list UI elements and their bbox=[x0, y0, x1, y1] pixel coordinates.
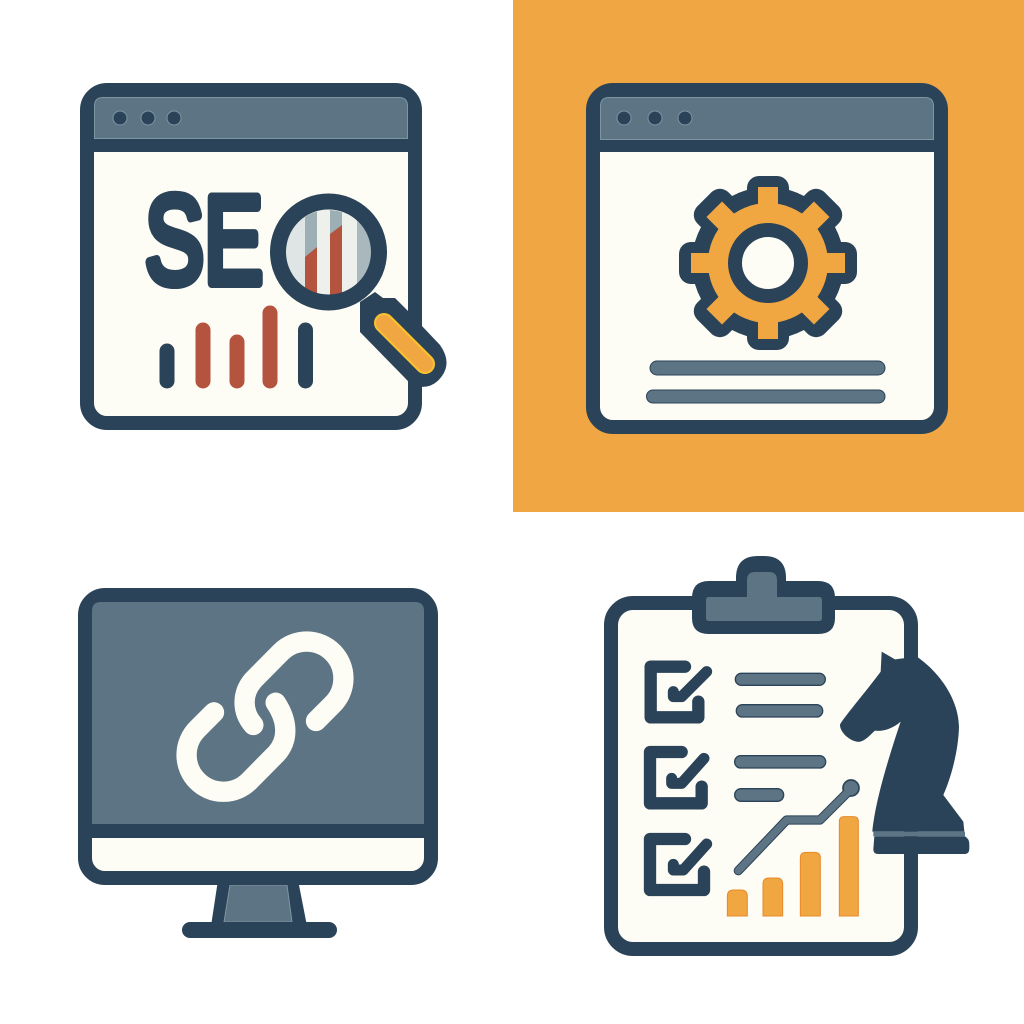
clip bbox=[692, 556, 835, 634]
trend line bbox=[738, 780, 859, 871]
screen frame bbox=[85, 595, 431, 878]
window frame bbox=[87, 90, 415, 423]
title bar bbox=[600, 98, 934, 152]
panel: orange background bbox=[513, 0, 1024, 512]
title bar bbox=[94, 98, 408, 152]
checklist and chart bbox=[650, 652, 969, 916]
stand bbox=[182, 880, 337, 938]
panel: strategy clipboard bbox=[611, 556, 969, 949]
panel: monitor with link bbox=[85, 595, 431, 938]
SE text: SE bbox=[145, 172, 263, 310]
text lines bbox=[646, 361, 885, 403]
board bbox=[611, 603, 911, 949]
screen bbox=[92, 602, 424, 824]
window frame bbox=[593, 90, 941, 427]
icon: chess knight bbox=[840, 652, 969, 854]
icon: chain link bbox=[187, 642, 343, 792]
magnifying glass bbox=[278, 202, 447, 387]
text lines bbox=[735, 673, 826, 801]
bar chart bbox=[167, 313, 306, 381]
panel: SEO browser window bbox=[87, 90, 447, 423]
orange bars bbox=[727, 817, 858, 916]
panel: settings browser window bbox=[593, 90, 941, 427]
checkboxes bbox=[650, 667, 707, 890]
icon: gear bbox=[679, 176, 857, 350]
